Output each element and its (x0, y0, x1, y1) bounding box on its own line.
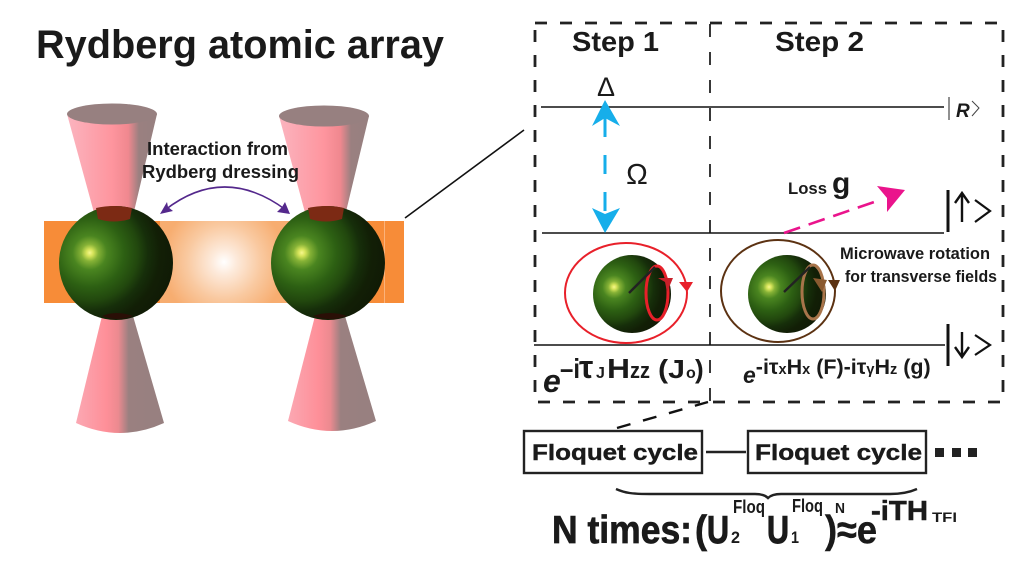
Floquet cycle 2 (748, 431, 926, 473)
step 1 formula: ) (695, 354, 704, 384)
bottom left tweezer cone (76, 316, 164, 433)
N times formula: -iTH (871, 495, 928, 526)
level R (541, 97, 979, 122)
N times formula: 2 (731, 528, 740, 547)
step 1 formula: o (686, 365, 696, 382)
interaction arrow (160, 187, 290, 214)
N times formula (552, 495, 957, 552)
dashed frame (535, 23, 1003, 402)
loss label: Loss (788, 179, 827, 198)
Floquet cycle 2: Floquet cycle (755, 440, 922, 465)
step 1 formula: J (596, 365, 605, 382)
panel: Rydberg atom array illustration (44, 104, 404, 433)
level down (534, 324, 990, 366)
step 2 formula: xHx (F)-iτγHz (g) (779, 355, 931, 379)
dressing laser beam (44, 221, 404, 303)
zoom connector line (405, 130, 524, 218)
Floquet cycle 1 (524, 431, 702, 473)
top left tweezer cone (67, 104, 157, 223)
brace (616, 489, 917, 498)
step 1 atom with rotation (565, 243, 693, 343)
cycle connector (706, 451, 746, 453)
ellipsis squares (935, 448, 977, 457)
bottom right tweezer cone (288, 316, 376, 431)
interaction label (142, 139, 299, 182)
microwave label: Microwave rotation (840, 244, 990, 263)
panel: Floquet steps (534, 23, 1003, 402)
left atom (59, 206, 173, 320)
loss arrow (784, 186, 905, 233)
interaction label: Interaction from (147, 139, 288, 159)
N times formula: U (767, 509, 789, 552)
step 1 formula: zz (630, 358, 650, 383)
omega label: Ω (626, 159, 648, 191)
step 1 formula: –i (560, 353, 580, 384)
N times formula: Floq (733, 497, 765, 517)
step 1 formula: H (607, 353, 630, 384)
title: Rydberg atomic array (36, 23, 445, 67)
N times formula: )≈e (825, 509, 877, 552)
N times formula: N times: (552, 509, 692, 552)
step 2 formula: -iτ (756, 355, 779, 379)
Floquet cycle 1: Floquet cycle (532, 440, 698, 465)
N times formula: 1 (791, 528, 799, 547)
microwave label: for transverse fields (845, 267, 997, 286)
loss label: g (832, 167, 850, 200)
N times formula: ( (695, 509, 707, 552)
level R: R (956, 101, 970, 122)
Rabi coupling arrow (592, 100, 620, 233)
interaction label: Rydberg dressing (142, 162, 299, 182)
loss label (788, 167, 850, 200)
step 1 formula: τ (579, 349, 593, 385)
N times formula: N (835, 500, 845, 517)
step 2 heading: Step 2 (775, 26, 864, 57)
top right tweezer cone (279, 106, 369, 223)
microwave label (840, 244, 997, 286)
dashed connector to Floquet cycle (617, 402, 708, 428)
N times formula: Floq (792, 496, 823, 516)
level up (542, 190, 990, 233)
step 1 formula: (J (658, 354, 685, 384)
delta label: Δ (597, 72, 615, 102)
step 1 heading: Step 1 (572, 26, 659, 57)
N times formula: TFI (932, 509, 957, 525)
step 1 formula: e (543, 363, 561, 399)
N times formula: U (707, 509, 729, 552)
step divider (709, 24, 711, 402)
step 1 formula (543, 349, 704, 399)
step 2 atom with rotation (721, 240, 840, 342)
right atom (271, 206, 385, 320)
step 2 formula: e (743, 362, 756, 388)
